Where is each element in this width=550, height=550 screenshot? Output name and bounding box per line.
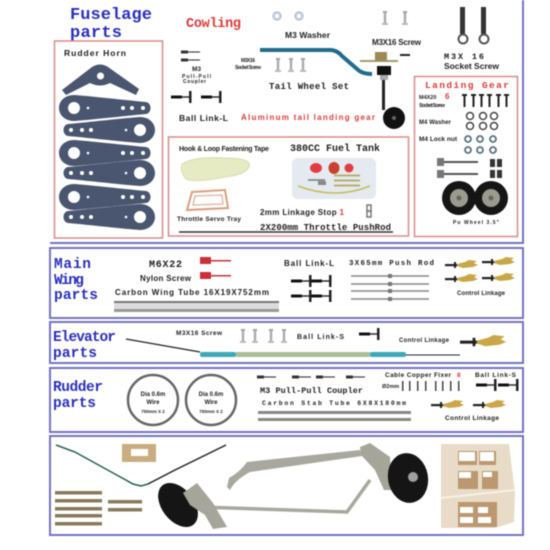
icon: main gear leg	[227, 443, 432, 506]
icons: screws	[240, 329, 287, 343]
icon: tape	[182, 158, 249, 181]
icon: tail wheel screws	[275, 58, 306, 72]
label: M3X16 Socket Screw: M3X 16	[444, 52, 484, 62]
heading: Elevator parts: parts	[53, 346, 97, 362]
icon: washers	[466, 112, 498, 130]
heading: Landing Gear: Landing Gear	[425, 80, 509, 91]
label: M3X16 Screw: M3X16 Screw	[372, 38, 422, 47]
label: M4X20 6 Socket Screw: 6	[445, 92, 450, 101]
icon: wire coil 1: Dia 0.6m	[141, 392, 165, 398]
icon: plywood mount	[122, 444, 156, 462]
label: Push Rod: 3X65mm Push Rod	[349, 260, 434, 268]
icon: wire coil 2: 750mm X 2	[199, 409, 223, 414]
icon: throttle servo tray	[187, 190, 228, 210]
icon: ball link S	[359, 328, 380, 340]
icons: control linkages	[431, 400, 506, 408]
heading: Fuselage parts: Fuselage	[70, 6, 152, 25]
icons: wood strips	[55, 491, 142, 526]
icon: wire coil 1: 750mm X 2	[141, 409, 165, 414]
icons: ball links L	[291, 275, 332, 302]
icon: ball links L	[171, 91, 222, 103]
icon: wire coil 1	[128, 375, 178, 425]
panel: main wing parts	[50, 248, 523, 318]
label: M3 Pull-Pull Coupler: Coupler	[183, 79, 206, 85]
label: M3 Pull-Pull Coupler: M3 Pull-Pull Coupler	[260, 386, 363, 396]
icon: carbon tube	[114, 301, 279, 312]
icon: tail wheel assembly	[260, 50, 410, 129]
label: Carbon Wing Tube: Carbon Wing Tube 16X19X752mm	[115, 288, 269, 297]
icon: carbon stab tube	[258, 411, 411, 421]
label: 380CC Fuel Tank: 380CC Fuel Tank	[290, 143, 380, 155]
heading: Main Wing parts: Wing	[54, 273, 84, 289]
icons: copper fixers	[402, 381, 460, 391]
label: M3X16 Socket Screw: Socket Screw	[444, 61, 499, 71]
label: 2mm: Ø2mm	[382, 384, 399, 390]
label: 2X200mm Throttle PushRod: 2X200mm Throttle PushRod	[260, 223, 391, 233]
label: Ball Link-L: Ball Link-L	[179, 113, 228, 123]
icon: wire coil 2: Dia 0.6m	[199, 392, 223, 398]
icon: wooden box	[441, 444, 515, 528]
panel: fuselage parts frame	[50, 0, 523, 243]
icon: front wheel strut	[150, 475, 370, 535]
panel: bottom parts	[50, 436, 523, 535]
label: Ball Link-S: Ball Link-S	[475, 372, 517, 379]
label: 2mm Linkage Stop: 2mm Linkage Stop 1	[260, 208, 345, 217]
icon: M3X16 screws top	[382, 11, 408, 25]
icon: V rudder horn	[62, 64, 139, 95]
icons: push rods	[351, 274, 429, 301]
label: M3 Pull-Pull Coupler: Pull-Pull	[182, 74, 212, 80]
icon: wire coil 1: Wire	[147, 400, 160, 406]
icons: couplers	[257, 376, 365, 378]
label: Control Linkage: Control Linkage	[445, 415, 499, 422]
label: Throttle Servo Tray: Throttle Servo Tray	[177, 216, 241, 223]
label: M6X22: M6X22	[149, 260, 182, 271]
label: Hook and Loop Fastening Tape: Hook & Loop Fastening Tape	[179, 146, 269, 153]
label: Control Linkage: Control Linkage	[399, 338, 450, 344]
label: M3X16 Screw: M3X16 Screw	[176, 330, 223, 337]
label: Rudder Horn: Rudder Horn	[64, 48, 126, 58]
label: Nylon Screw: Nylon Screw	[140, 274, 192, 283]
label: Tail Wheel Set: Tail Wheel Set	[269, 82, 349, 92]
label: M3X16 Socket Screw small: M3X16	[241, 58, 255, 64]
label: Control Linkage: Control Linkage	[457, 291, 506, 297]
label: M4 Lock nut: M4 Lock nut	[419, 136, 458, 143]
icon: elevator pushrod	[126, 339, 460, 357]
panel: rudder horn box	[54, 41, 162, 238]
panel: landing gear box	[414, 76, 518, 236]
heading: Cowling: Cowling	[186, 17, 241, 32]
label: M3X16 Socket Screw small: Socket Screw	[235, 65, 261, 71]
icon: M3 washers	[274, 12, 302, 20]
heading: Main Wing parts: Main	[54, 257, 91, 273]
icon: wheels	[442, 181, 508, 215]
icons: nylon screws	[200, 257, 231, 279]
icon: green wire gear	[56, 445, 226, 486]
decorative: pushrod line	[179, 231, 393, 233]
icon: control linkage	[460, 335, 506, 346]
label: Ball Link-S: Ball Link-S	[297, 334, 344, 341]
icon: socket screws	[458, 7, 488, 44]
icon: fuel tank parts	[292, 158, 376, 199]
icon: M3 pull-pull coupler	[181, 50, 200, 62]
heading: Fuselage parts: parts	[70, 24, 122, 43]
heading: Elevator parts: Elevator	[53, 330, 116, 346]
label: M4X20 6 Socket Screw: M4X20	[419, 95, 436, 101]
icon: linkage stop	[367, 205, 371, 217]
label: Aluminum tail landing gear: Aluminum tail landing gear	[241, 113, 375, 122]
label: Cable Copper Fixer: Cable Copper Fixer	[385, 372, 451, 379]
label: M4 Washer: M4 Washer	[419, 120, 452, 126]
panel: rudder parts	[50, 368, 523, 432]
heading: Main Wing parts: parts	[54, 288, 98, 304]
icon: axles and collars	[437, 158, 502, 178]
label: Ball Link-L: Ball Link-L	[284, 259, 334, 268]
icon: wire coil 2	[186, 375, 236, 425]
icon: six socket screws	[462, 94, 509, 107]
label: Pu Wheel 3.5: Pu Wheel 3.5"	[453, 220, 500, 226]
panel: elevator parts	[50, 322, 523, 363]
label: M4X20 6 Socket Screw: Socket Screw	[419, 103, 446, 109]
icons: control linkages	[445, 257, 515, 282]
icons: rudder horn arms	[59, 95, 155, 230]
label: M3 Washer: M3 Washer	[285, 30, 331, 40]
label: Carbon Stab Tube: Carbon Stab Tube 6X8X180mm	[262, 400, 406, 407]
panel: fuel tank box	[168, 137, 408, 236]
icon: wire coil 2: Wire	[205, 400, 218, 406]
heading: Rudder parts: parts	[53, 396, 96, 412]
label: Cable Copper Fixer: 8	[457, 372, 461, 379]
icon: lock nuts	[465, 136, 496, 153]
icons: ball links S	[476, 379, 518, 391]
heading: Rudder parts: Rudder	[53, 380, 103, 396]
label: M3 Pull-Pull Coupler: M3	[192, 66, 201, 73]
